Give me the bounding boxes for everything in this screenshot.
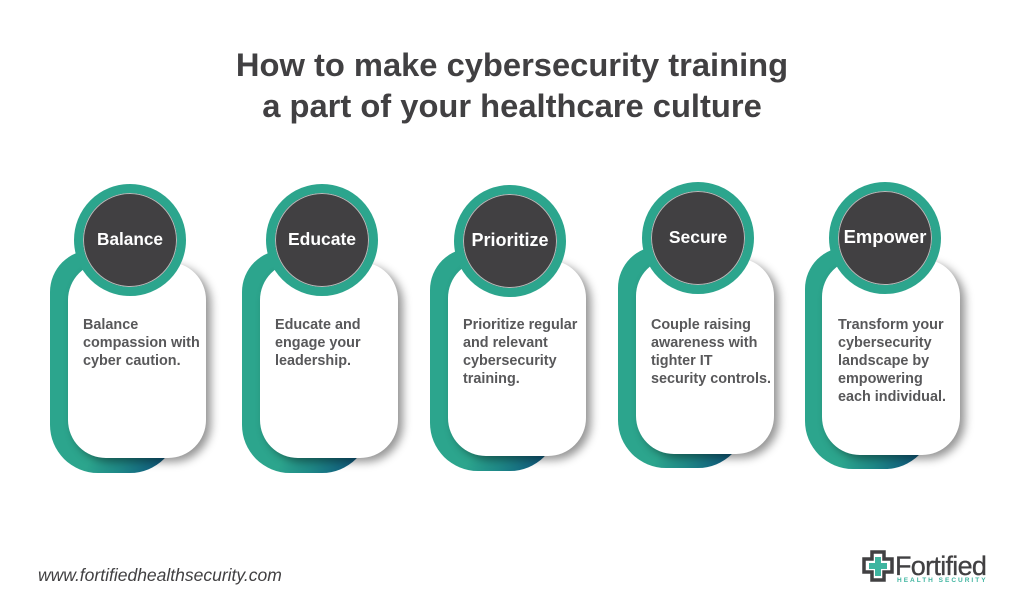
description text: compassion with [83,335,200,351]
teal backing shape [242,250,370,473]
description text: awareness with [651,335,757,351]
description text: training. [463,371,520,387]
logo: Fortified Health Security [862,550,988,584]
badge: Secure: Secure [669,227,727,247]
description text: Prioritize regular [463,317,577,333]
badge: Prioritize [454,185,566,297]
tagline: HEALTH SECURITY [897,577,988,584]
badge: Secure [642,182,754,294]
description text [83,317,200,369]
description text: Couple raising [651,317,751,333]
description text: Educate and [275,317,361,333]
wordmark: Fortified [895,551,986,581]
description text: cybersecurity [463,353,557,369]
description text: security controls. [651,371,771,387]
badge: Educate [266,184,378,296]
description text [463,317,578,387]
description text: each individual. [838,389,946,405]
description text: Transform your [838,317,944,333]
panel: Secure [618,182,785,468]
panel: Prioritize [430,185,597,471]
description text: and relevant [463,335,548,351]
white card [448,260,586,456]
badge: Balance [74,184,186,296]
teal backing shape [805,247,933,469]
badge: Balance: Balance [97,229,163,249]
badge: Educate: Educate [288,229,356,249]
badge: Prioritize: Prioritize [471,230,549,250]
teal backing shape [50,250,178,473]
badge: Empower [829,182,941,294]
description text: cybersecurity [838,335,932,351]
description text: cyber caution. [83,353,181,369]
title: a part of your healthcare culture [262,87,762,124]
panel: Educate [242,184,409,473]
badge: Empower: Empower [844,226,926,247]
description text: Balance [83,317,138,333]
website url: www.fortifiedhealthsecurity.com [38,565,282,585]
description text: landscape by [838,353,929,369]
panel: Balance [50,184,217,473]
teal backing shape [430,248,558,471]
title: How to make cybersecurity training [236,46,788,83]
panel: Empower [805,182,971,469]
white card [260,262,398,458]
description text: leadership. [275,353,351,369]
white card [636,258,774,454]
icon: medical cross [862,550,894,582]
description text: engage your [275,335,361,351]
description text: empowering [838,371,923,387]
white card [68,262,206,458]
teal backing shape [618,246,746,468]
description text: tighter IT [651,353,713,369]
description text [838,317,946,405]
description text [275,317,361,369]
description text [651,317,771,387]
title [236,46,788,124]
white card [822,259,960,455]
